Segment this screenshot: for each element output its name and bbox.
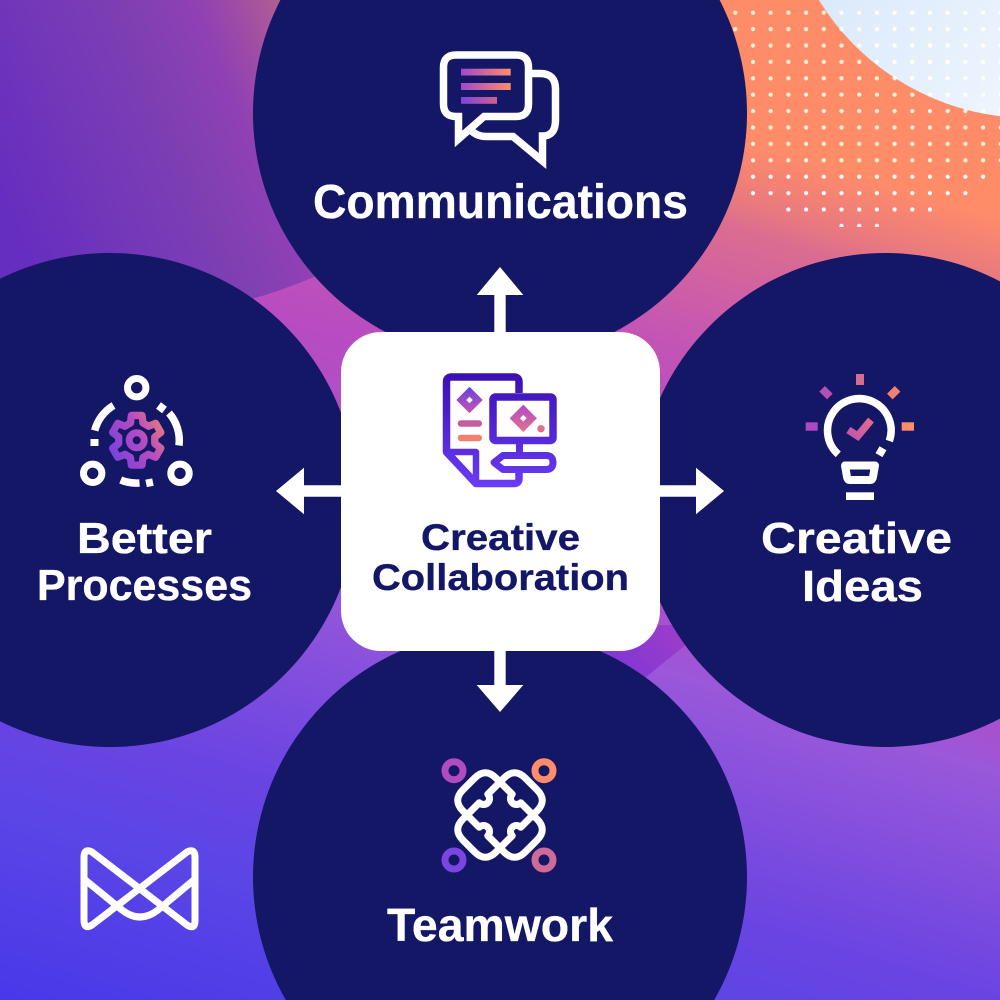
icon: gear and cycle xyxy=(84,378,189,487)
background top-left facet xyxy=(0,0,330,380)
circle: teamwork xyxy=(253,630,747,1000)
heading: creative ideas xyxy=(761,514,952,611)
dot grid xyxy=(732,10,1000,227)
heading: better processes: Better xyxy=(77,514,212,563)
heading: better processes xyxy=(37,514,252,610)
arrow: down xyxy=(477,640,523,712)
icon: document and monitor xyxy=(446,377,553,484)
heading: communications: Communications xyxy=(313,176,688,229)
heading: creative ideas: Ideas xyxy=(802,562,923,611)
icon: speech bubbles xyxy=(444,55,556,161)
arrow: right xyxy=(650,468,724,514)
heading: creative collaboration xyxy=(372,517,629,598)
heading: creative collaboration: Creative xyxy=(421,517,580,558)
heading: creative collaboration: Collaboration xyxy=(372,557,629,598)
icon: light bulb xyxy=(806,374,914,500)
background lower-right dark facet xyxy=(560,625,705,712)
heading: teamwork: Teamwork xyxy=(387,899,613,951)
heading: creative ideas: Creative xyxy=(761,514,952,563)
arrow: left xyxy=(276,468,350,514)
circle: better processes xyxy=(0,253,357,747)
heading: better processes: Processes xyxy=(37,561,252,610)
centre panel xyxy=(341,332,660,651)
arrow: up xyxy=(477,267,523,340)
circle: communications xyxy=(253,0,747,360)
circle: creative ideas xyxy=(638,253,1000,747)
light corner circle xyxy=(819,0,1000,116)
icon: puzzle xyxy=(445,762,553,869)
logo xyxy=(84,851,195,927)
